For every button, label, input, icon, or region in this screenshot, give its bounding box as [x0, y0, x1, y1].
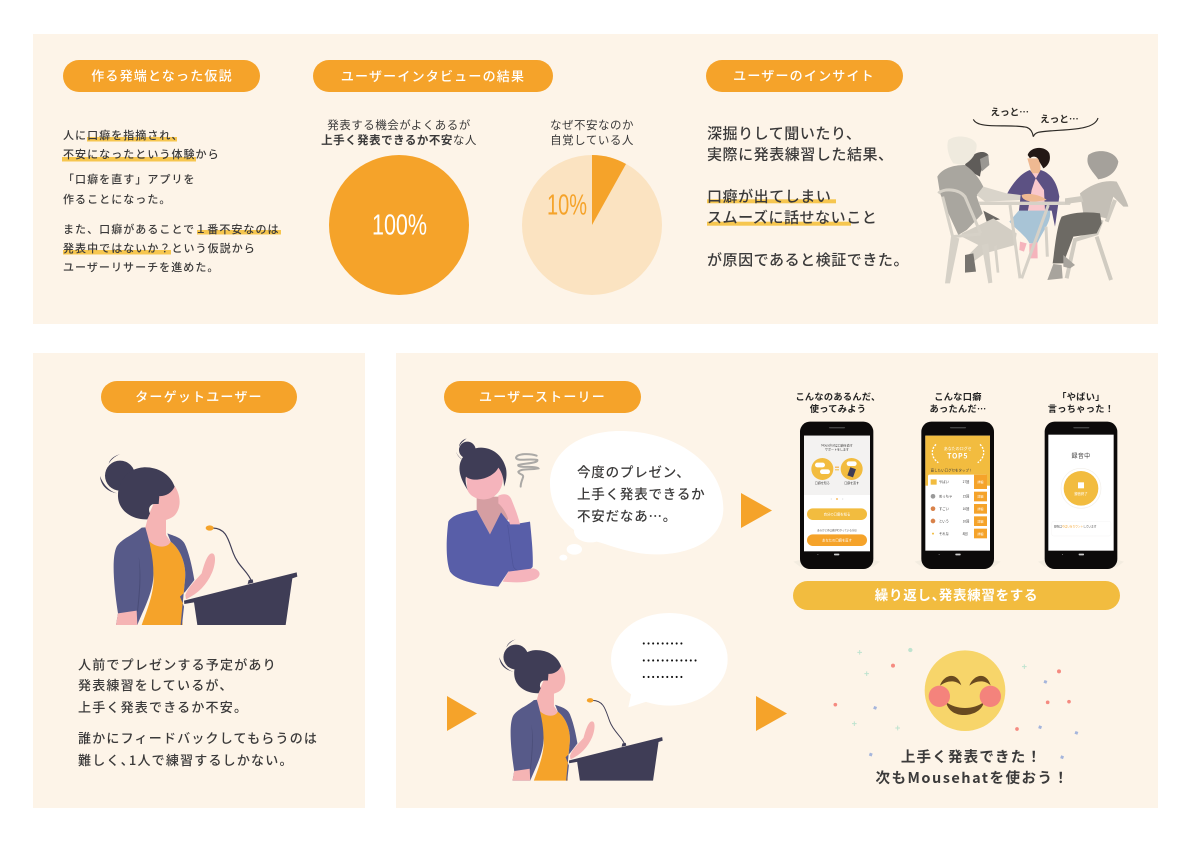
- text block: success message: [876, 746, 1069, 788]
- phone: top 5 screen: 10回: [963, 518, 969, 523]
- phone: top 5 screen: 詳細: [977, 518, 983, 523]
- phone: top 5 screen: [915, 422, 1001, 569]
- phone: top 5 screen: という: [939, 518, 949, 523]
- speech bubble: worried thought: [550, 431, 723, 561]
- right chair: [1067, 200, 1115, 280]
- phone: top 5 screen: やばい: [939, 479, 950, 484]
- panel: target user: [33, 353, 365, 808]
- table: [978, 202, 1072, 205]
- text block: target user: 難しく、1人で練習するしかない。: [78, 750, 294, 769]
- phone: onboarding screen: 自分の口癖を知る: [824, 511, 850, 516]
- pie chart: 10%: 10%: [547, 189, 587, 221]
- heading: target user: ターゲットユーザー: [135, 386, 263, 406]
- left chair: [938, 190, 981, 237]
- speech bubble: silent dots: ............: [642, 650, 698, 666]
- speech bubble: worried thought: 不安だなあ…。: [577, 505, 677, 525]
- caption: phone 3: 言っちゃった！: [1048, 401, 1114, 415]
- text block: hypothesis: 不安になったという体験から: [63, 146, 220, 162]
- caption: phone 2: こんな口癖: [934, 389, 982, 403]
- illustration: worried woman: [447, 438, 540, 587]
- text block: success message: 次もMousehatを使おう！: [876, 767, 1069, 788]
- phone: top 5 screen: めっちゃ: [939, 494, 952, 499]
- text block: hypothesis: 作ることになった。: [63, 191, 171, 207]
- phone: top 5 screen: 15回: [963, 494, 969, 499]
- pie chart: 100%: [329, 155, 469, 295]
- arrow: to success: [756, 696, 787, 731]
- phone: onboarding screen: Mousehatは口癖を直す: [821, 442, 853, 447]
- heading: hypothesis: 作る発端となった仮説: [91, 66, 233, 84]
- phone: recording screen: 録音中: [1072, 451, 1090, 460]
- illustration: woman presenting again: [499, 639, 663, 781]
- heading: target user: [101, 381, 297, 413]
- illustration: people at table: えっと…: [990, 104, 1029, 118]
- text block: target user: [78, 654, 318, 769]
- phone: onboarding screen: サポートをします: [825, 446, 849, 451]
- text block: insight: が原因であると検証できた。: [707, 249, 909, 270]
- text block: insight: スムーズに話せないこと: [707, 206, 877, 228]
- text block: hypothesis: 「口癖を直す」アプリを: [63, 171, 196, 187]
- pie label: self aware users: なぜ不安なのか: [550, 117, 634, 133]
- banner: repeated practice: 繰り返し、発表練習をする: [875, 584, 1038, 604]
- phone: top 5 screen: 10回: [963, 506, 969, 511]
- heading: insight: ユーザーのインサイト: [733, 66, 875, 84]
- panel: user story: [396, 353, 1158, 808]
- text block: target user: 発表練習をしているが、: [78, 675, 234, 694]
- arrow: to second presentation: [447, 696, 477, 731]
- phone: recording screen: 録音終了: [1074, 491, 1088, 496]
- text block: target user: 人前でプレゼンする予定があり: [78, 654, 277, 674]
- phone: onboarding screen: 口癖を知る: [815, 480, 830, 485]
- woman behind: [965, 152, 988, 177]
- illustration: people at table: えっと…: [1040, 111, 1079, 125]
- text block: success message: 上手く発表できた！: [901, 746, 1042, 767]
- banner: repeated practice: [793, 581, 1120, 610]
- caption: phone 2: あったんだ…: [930, 401, 986, 415]
- text block: insight: 深掘りして聞いたり、: [707, 122, 861, 144]
- text block: hypothesis: [62, 127, 281, 275]
- phone: top 5 screen: 詳細: [977, 531, 983, 536]
- heading: interview results: ユーザーインタビューの結果: [341, 66, 525, 85]
- phone: top 5 screen: あなたの口グセ: [944, 445, 972, 452]
- phone: recording screen: [1038, 422, 1124, 569]
- text block: target user: 誰かにフィードバックしてもらうのは: [78, 728, 318, 747]
- speech brace: [973, 118, 1098, 137]
- heading: user story: [444, 381, 641, 413]
- heading: user story: ユーザーストーリー: [479, 386, 606, 406]
- heading: insight: [706, 60, 903, 92]
- caption: phone 1: 使ってみよう: [810, 401, 866, 415]
- text block: insight: 口癖が出てしまい: [707, 186, 831, 206]
- caption: phone 1: こんなのあるんだ、: [795, 389, 881, 403]
- text block: hypothesis: 発表中ではないか？という仮説から: [63, 240, 256, 256]
- phone: onboarding screen: あなたの口癖を直す: [822, 537, 853, 542]
- pie chart: 10%: [522, 155, 662, 295]
- heading: hypothesis: [63, 60, 260, 92]
- illustration: woman presenting: [100, 454, 297, 625]
- phone: top 5 screen: 直したい口グセをタップ！: [931, 467, 972, 473]
- text block: target user: 上手く発表できるか不安。: [78, 697, 248, 716]
- phone: recording screen: 現在はやばいをカウントしています: [1054, 525, 1097, 529]
- pie label: anxious users: [321, 117, 477, 148]
- speech bubble: silent dots: [611, 613, 728, 707]
- phone: onboarding screen: [793, 422, 880, 569]
- pie label: anxious users: 発表する機会がよくあるが: [327, 117, 471, 133]
- illustration: people at table: [937, 104, 1128, 283]
- speech bubble: worried thought: 上手く発表できるか: [577, 483, 705, 503]
- text block: insight: 実際に発表練習した結果、: [707, 144, 894, 164]
- caption: phone 2: [930, 389, 986, 415]
- speech bubble: silent dots: .........: [642, 666, 684, 682]
- phone: top 5 screen: すごい: [939, 506, 950, 511]
- phone: top 5 screen: 27回: [963, 479, 969, 484]
- phone: top 5 screen: それな: [939, 531, 950, 536]
- phone: top 5 screen: 8回: [963, 531, 968, 536]
- heading: interview results: [313, 60, 553, 92]
- caption: phone 3: [1048, 389, 1114, 415]
- caption: phone 3: 「やばい」: [1057, 389, 1105, 403]
- center woman: [1027, 158, 1041, 173]
- phone: top 5 screen: 詳細: [977, 494, 983, 499]
- phone: top 5 screen: 詳細: [977, 506, 983, 511]
- icon: smiling face with confetti: [833, 648, 1078, 759]
- text block: hypothesis: また、口癖があることで１番不安なのは: [63, 221, 280, 237]
- pie chart: 100%: 100%: [372, 209, 427, 241]
- phone: onboarding screen: あらかじめ口癖がわかっている方は: [817, 528, 857, 532]
- pie label: self aware users: [550, 117, 634, 148]
- phone: onboarding screen: 口癖を直す: [844, 480, 859, 485]
- text block: hypothesis: ユーザーリサーチを進めた。: [63, 259, 219, 275]
- pie label: self aware users: 自覚している人: [550, 132, 634, 148]
- speech bubble: worried thought: 今度のプレゼン、: [577, 461, 691, 481]
- arrow: to phones: [741, 493, 772, 528]
- speech bubble: silent dots: .........: [642, 632, 684, 648]
- pie label: anxious users: 上手く発表できるか不安な人: [321, 132, 477, 148]
- text block: hypothesis: 人に口癖を指摘され、: [63, 127, 184, 143]
- panel: top research summary: [33, 34, 1158, 324]
- right woman: [1087, 151, 1118, 179]
- phone: top 5 screen: 詳細: [977, 479, 983, 484]
- caption: phone 1: [795, 389, 881, 415]
- phone: top 5 screen: TOP5: [947, 452, 968, 462]
- text block: insight: [707, 122, 909, 270]
- left man: [947, 136, 977, 165]
